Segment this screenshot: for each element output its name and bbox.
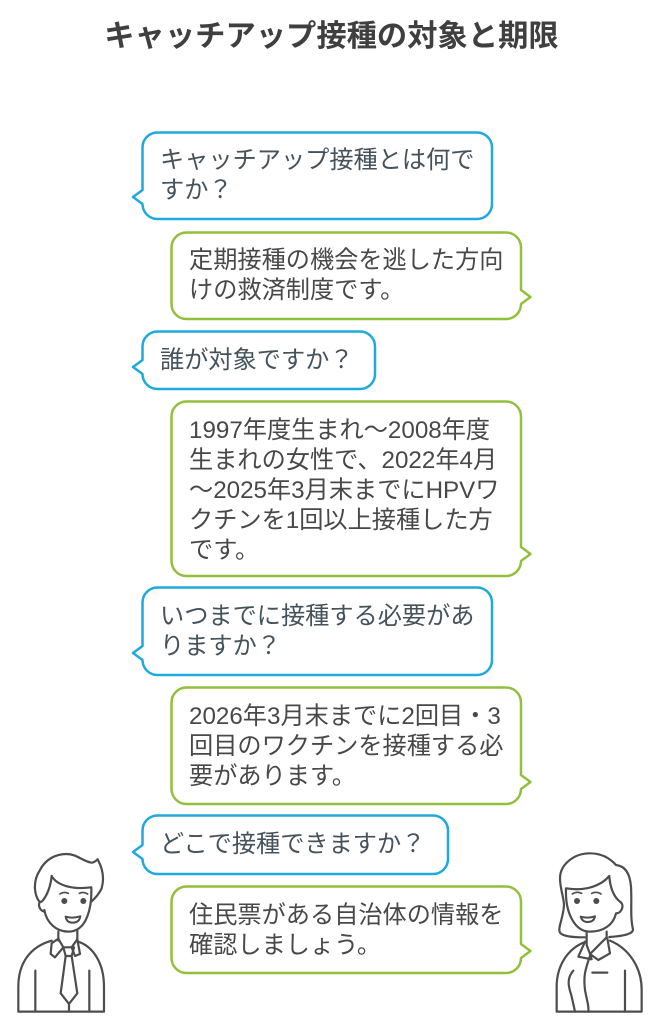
question bubble 2: 誰が対象ですか？	[160, 347, 354, 374]
answer bubble 4: 住民票がある自治体の情報を	[189, 902, 503, 929]
answer bubble 4: 確認しましょう。	[189, 932, 381, 959]
question bubble 3	[133, 588, 492, 675]
answer bubble 3: 要があります。	[189, 763, 356, 790]
answer bubble 2: 1997年度生まれ～2008年度	[189, 417, 490, 444]
answer bubble 4	[172, 886, 530, 973]
answer bubble 2	[172, 402, 530, 576]
question bubble 4: どこで接種できますか？	[160, 831, 425, 858]
answer bubble 1	[172, 232, 530, 319]
answer bubble 2: 生まれの女性で、2022年4月	[189, 447, 497, 474]
question bubble 2	[133, 332, 375, 389]
question bubble 1: キャッチアップ接種とは何で	[160, 147, 474, 174]
answer bubble 1: けの救済制度です。	[189, 277, 404, 304]
answer bubble 1: 定期接種の機会を逃した方向	[189, 247, 503, 274]
answer bubble 3	[172, 688, 530, 804]
question bubble 1: すか？	[160, 177, 233, 204]
icon: woman with bob hair	[557, 853, 642, 1012]
answer bubble 2: ～2025年3月末までにHPVワ	[189, 477, 500, 504]
title: キャッチアップ接種の対象と期限	[104, 19, 559, 53]
answer bubble 2: です。	[189, 537, 259, 564]
question bubble 4	[133, 816, 448, 874]
question bubble 1	[133, 132, 492, 219]
icon: man with tie	[18, 854, 104, 1012]
question bubble 3: いつまでに接種する必要があ	[160, 603, 474, 630]
answer bubble 2: クチンを1回以上接種した方	[189, 507, 493, 534]
question bubble 3: りますか？	[160, 633, 281, 660]
answer bubble 3: 2026年3月末までに2回目・3	[189, 703, 501, 730]
answer bubble 3: 回目のワクチンを接種する必	[189, 733, 503, 760]
